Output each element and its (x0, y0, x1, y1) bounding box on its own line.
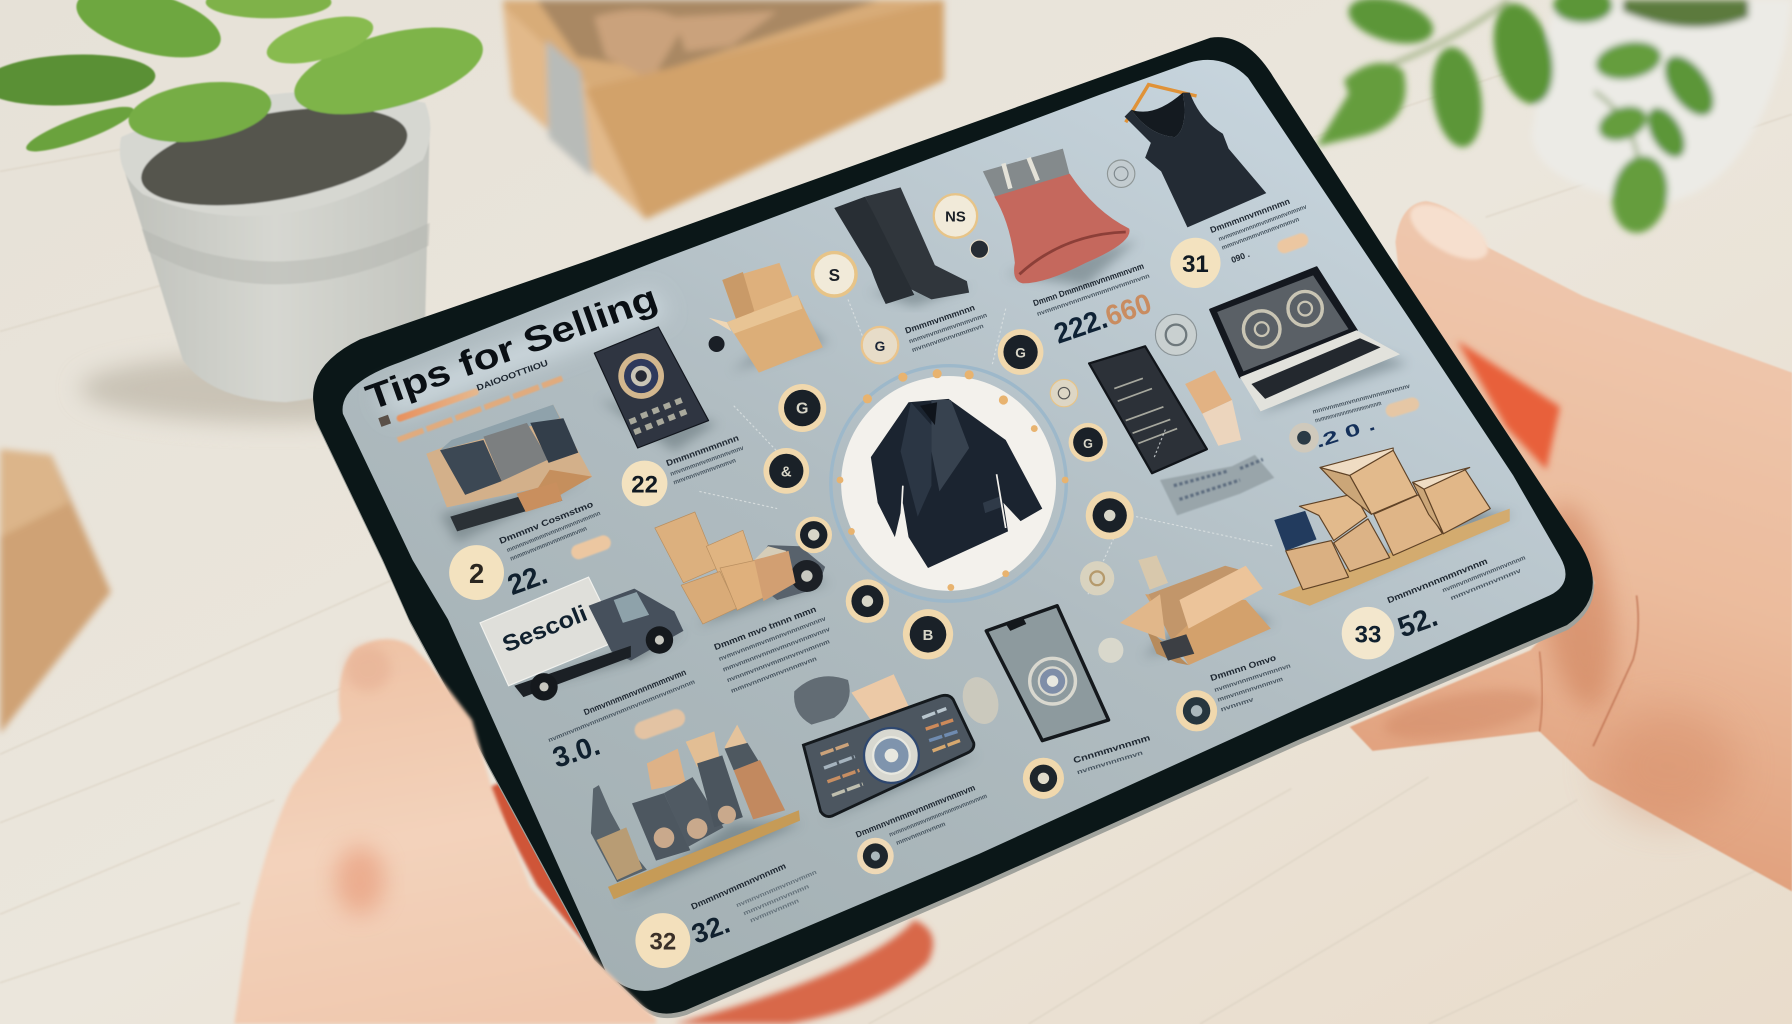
text block: beside lower phone: nvmnvnnmmvn (1076, 749, 1144, 776)
text block: sock caption (904, 299, 991, 354)
cardboard boxes stack (709, 263, 829, 373)
open cardboard box (1120, 555, 1274, 665)
potted plant top left (0, 0, 492, 423)
text block: centre left (665, 432, 748, 486)
text block: tank top caption: Dmmmnnvmnnnmn (1209, 196, 1291, 235)
text block: centre left: nnvnmmnnvmmnnnvmnv (669, 444, 745, 478)
title sub-text bars: DAIOOOTTIIOU (475, 358, 549, 393)
text block: centre left: Dmmnnmmnnnn (665, 433, 740, 468)
title: Tips for Selling (361, 277, 663, 418)
text block: price caption: nvmmnnvnnnmvnmmnnvnmnnvnn (1036, 273, 1151, 318)
text block: beside lower phone: Cnnmmvnnmm (1072, 732, 1152, 765)
small outline coin near tank top (1107, 160, 1135, 187)
pale coin (957, 672, 1004, 729)
laptop (1210, 267, 1408, 414)
text block: sock caption: mvnnnvmnnvnmmnvn (911, 323, 985, 354)
text block: centre lower: nvmnvnnmmvnmnnvnnnmvnnnv (718, 615, 827, 663)
statistic: 2.0: .2 0 . (1313, 414, 1378, 452)
socks (834, 187, 971, 306)
circular badges: & (781, 465, 792, 481)
text block: centre lower: mmvnmnnvnnmvmnnvnnmvnnv (722, 626, 832, 673)
text block: price caption: Dmmn Dmmnmmvnnmmnvnm (1032, 261, 1145, 308)
statistic: 32 bottom: 32. (687, 907, 734, 950)
text block: bottom centre: Dmmnnvnnmmvnnmmvnnmvm (854, 782, 977, 840)
text block: pallet caption: Dmmnvnnnmmnvnnm (1386, 556, 1489, 605)
text lines beside 32: nvmmvnnmn (749, 897, 800, 924)
statistic: 52 right: 52. (1394, 601, 1442, 644)
text block: tank top caption: 090 . (1230, 249, 1251, 265)
peach pill near tank top (1275, 231, 1310, 255)
jacket (871, 399, 1042, 568)
text block: left upper (498, 498, 605, 564)
circular badges: 2 (469, 558, 484, 589)
dashed connector lines (699, 299, 1274, 594)
tank top with hanger (1125, 85, 1266, 227)
delivery truck (480, 577, 686, 701)
text lines beside 32: nvmnvnnmmvnnvmmn (735, 869, 818, 909)
phone with keypad (594, 327, 718, 451)
text lines beside 32: mmvnmnnvnnmn (742, 883, 811, 917)
phone centre right (1089, 346, 1207, 473)
text block: laptop caption: nvmmnvnnnmvnnmnvnnm (1314, 400, 1383, 424)
circular badges: 22 (631, 472, 658, 499)
text block: lower right: mmvnmnnvnnmvm (1217, 676, 1284, 704)
text block: centre left: mnvnnnvmnnvnnmvn (672, 457, 737, 486)
text block: centre lower: Dmmm mvo tmnn mmn (713, 604, 818, 652)
tablet screen (343, 60, 1566, 991)
text block: tank top caption (1209, 191, 1317, 268)
text block: truck caption lower: Dnmvnnmmnvnnnmmnvmn (582, 667, 688, 717)
plant and pot top right (1317, 0, 1792, 237)
statistic: 22: 22. (503, 558, 552, 602)
red sweater (983, 149, 1137, 286)
peach stat pill (569, 533, 613, 561)
cardboard box top (503, 0, 944, 219)
photo tile: product shelf (426, 405, 592, 543)
grey pouch and peach parcel (794, 674, 909, 725)
truck with boxes (655, 512, 829, 626)
text block: centre lower (713, 602, 840, 695)
circular badges: G (796, 401, 809, 418)
text lines beside 32 (735, 869, 826, 927)
text block: pallet caption: nvmnvnnmmvnmnnvnnnm (1441, 554, 1527, 594)
small peach parcel (1185, 370, 1241, 446)
text block: lower right (1209, 649, 1298, 713)
text block: bottom centre: nvmnvnnmmvnmnnvnnnmvnnnvnnm (888, 793, 989, 839)
lower finger behind tablet (674, 920, 933, 1024)
text block: lower right: Dmmnn Omvo (1209, 652, 1277, 683)
statistic: 222.660: 222.660 (1050, 288, 1156, 351)
glow behind title (377, 291, 669, 417)
circular badges: S (829, 265, 840, 285)
circular badges: G (1083, 437, 1093, 451)
text block: laptop caption: mnnvnmmnvnnnmvnnmmvnnnv (1312, 383, 1411, 416)
text block: truck caption lower: nvmnnvmmvnnnmnvnmnnvnmmnnvmnvnnm (547, 678, 697, 744)
circular badges: B (923, 628, 934, 644)
text block: bottom centre: mmvnmnnvnnm (895, 820, 947, 847)
right hand (1350, 193, 1792, 891)
title sub-text bars (378, 358, 562, 440)
circular badges: G (875, 339, 885, 354)
phone lower (986, 606, 1109, 741)
circular badges: 32 (650, 929, 676, 956)
cardboard box left (0, 449, 111, 734)
statistic: 3.0: 3.0. (549, 729, 604, 775)
text block: left upper: nnmmvnvmmnvnnnnmnvmn (509, 525, 588, 563)
text block: sock caption: Dmmmvnmmnnn (904, 302, 976, 336)
grey label tag (1160, 455, 1274, 515)
text block: pallet caption: mmvnmnnvnnmv (1450, 567, 1523, 602)
delivery truck: Sescoli (498, 600, 591, 657)
text block: lower right: nvnnmv (1220, 696, 1255, 713)
circular badges: G (1015, 346, 1026, 361)
text block: lower right: nvmnvnnmmvnmnnvn (1213, 662, 1292, 694)
bottles on shelf (591, 725, 802, 903)
text block: bottom centre (854, 779, 992, 860)
circular badges: NS (945, 210, 966, 226)
peach pill truck caption (632, 707, 688, 742)
circular badges: 33 (1355, 621, 1381, 648)
circular badges: 31 (1182, 251, 1209, 278)
text block: left upper: Dmmmv Cosmstmo (498, 499, 595, 546)
left hand in front of the tablet corner (234, 639, 656, 1024)
boxes on pallet (1274, 448, 1514, 606)
tablet body (313, 37, 1594, 1018)
peach pill laptop (1384, 396, 1421, 419)
text block: tank top caption: nvmmnnvnnnmvnmmnnvnmnnv (1218, 203, 1308, 243)
central jacket circle (831, 366, 1069, 601)
text block: centre lower: mmnvnnnvmnvnnnmvnn (730, 655, 818, 695)
text block: left upper: mnnnnvmmmnvnnnvmnnnvmmnn (506, 510, 602, 554)
text block: beside lower phone (1072, 732, 1155, 776)
circular badges (449, 194, 1394, 968)
small tablet with chart (803, 695, 978, 821)
text block: truck caption lower (542, 665, 697, 744)
text block: sock caption: nnmvnvnnmmvnnmvnmn (908, 312, 988, 345)
text block: centre lower: nvnnmvnnnvmmnnvnvnmnnm (726, 638, 831, 684)
text block: pallet caption (1386, 542, 1531, 624)
red shadow strip beside the tablet (486, 777, 640, 983)
text block: bottom left: Dmmnnvmmnnvnnmm (689, 860, 788, 912)
text block: tank top caption: mmnvnnmmvnnnmvnnmvn (1221, 216, 1300, 252)
